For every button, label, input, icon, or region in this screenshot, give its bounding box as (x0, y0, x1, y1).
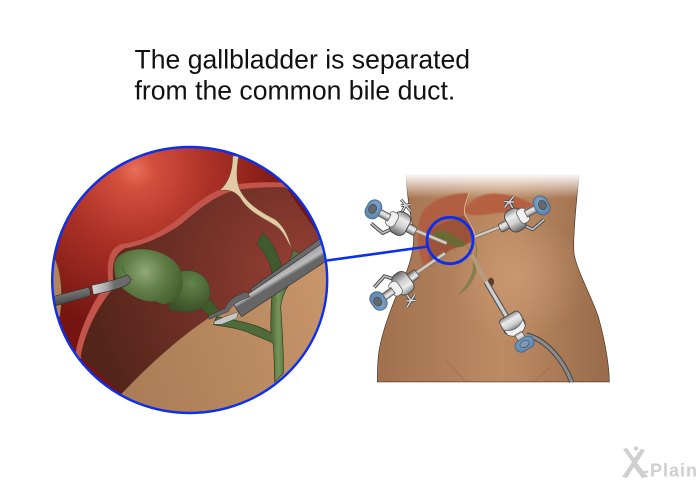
small locator circle (427, 217, 473, 264)
liver rim (75, 182, 288, 358)
magnified circle outline (52, 147, 327, 413)
camera cable (527, 335, 572, 382)
cannula shafts (407, 223, 509, 317)
panel: abdomen with instruments (359, 173, 609, 382)
title: The gallbladder is separated (134, 44, 470, 74)
trocar: upper left (359, 187, 426, 246)
logo: X-Plain watermark (622, 446, 697, 480)
laparoscope camera (498, 310, 537, 355)
gallbladder (434, 231, 467, 247)
connector line (327, 246, 428, 260)
panel: magnified view of gallbladder (47, 143, 333, 420)
shoulder fade (403, 173, 582, 198)
liver (418, 193, 533, 267)
torso (377, 175, 609, 382)
liver underside (81, 187, 333, 393)
liver upper surface (55, 148, 317, 394)
trocar: lower left (363, 260, 430, 323)
lower creases (447, 360, 550, 382)
navel (488, 278, 494, 286)
bile ducts (457, 245, 476, 295)
gallbladder neck (200, 299, 220, 316)
left skin sliver (53, 258, 62, 317)
logo: X-Plain watermark: -Plain (643, 460, 697, 480)
right hepatic duct (257, 233, 283, 273)
skin surface below the liver (121, 262, 326, 412)
left grasper (50, 275, 130, 307)
gallbladder main lobe (114, 249, 183, 304)
ligament (219, 156, 292, 249)
common bile duct (213, 283, 290, 382)
title: from the common bile duct. (134, 76, 455, 106)
trocar: upper right (489, 183, 556, 243)
gallbladder second lobe (168, 270, 210, 312)
right instrument (208, 239, 327, 324)
